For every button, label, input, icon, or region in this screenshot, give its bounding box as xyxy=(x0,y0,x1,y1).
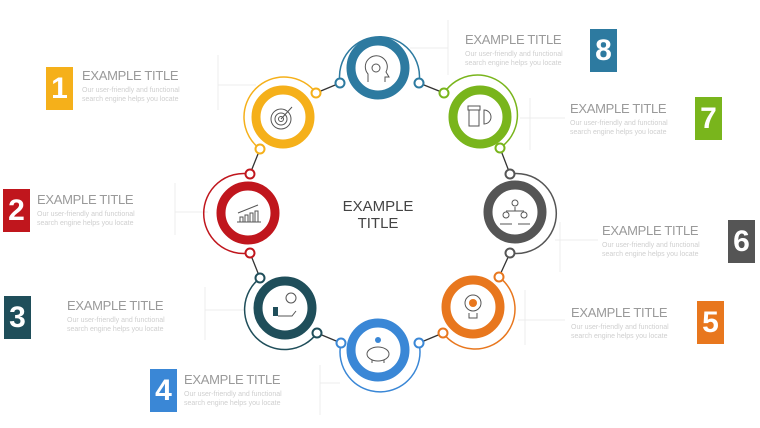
item 3: 3 xyxy=(9,301,26,334)
label 5 xyxy=(571,305,669,340)
label 2: EXAMPLE TITLE xyxy=(37,192,133,207)
circle 7 xyxy=(444,75,517,148)
item 4: 4 xyxy=(155,374,172,407)
label 3 xyxy=(67,298,165,333)
item 8 xyxy=(590,29,617,72)
label 1: search engine helps you locate xyxy=(82,96,179,103)
item 7: 7 xyxy=(700,102,717,135)
label 1: EXAMPLE TITLE xyxy=(82,68,178,83)
label 3: Our user-friendly and functional xyxy=(67,317,165,324)
label 3: search engine helps you locate xyxy=(67,326,164,333)
label 7: Our user-friendly and functional xyxy=(570,120,668,127)
item 2: 2 xyxy=(8,194,25,227)
circle 1 xyxy=(244,77,316,149)
label 5: Our user-friendly and functional xyxy=(571,324,669,331)
label 8 xyxy=(465,32,563,67)
item 3 xyxy=(4,296,31,339)
item 7 xyxy=(695,97,722,140)
label 5: EXAMPLE TITLE xyxy=(571,305,667,320)
connectors xyxy=(250,83,510,343)
circle 6 xyxy=(488,174,556,254)
item 8: 8 xyxy=(595,34,612,67)
label 1: Our user-friendly and functional xyxy=(82,87,180,94)
label 2: search engine helps you locate xyxy=(37,220,134,227)
label 6: Our user-friendly and functional xyxy=(602,242,700,249)
label 3: EXAMPLE TITLE xyxy=(67,298,163,313)
item 2 xyxy=(3,189,30,232)
item 6 xyxy=(728,220,755,263)
label 7: EXAMPLE TITLE xyxy=(570,101,666,116)
item 6: 6 xyxy=(733,225,750,258)
label 8: Our user-friendly and functional xyxy=(465,51,563,58)
item 5: 5 xyxy=(702,306,719,339)
dots xyxy=(246,78,514,348)
label 8: search engine helps you locate xyxy=(465,60,562,67)
circle 4 xyxy=(340,323,420,392)
label 2: Our user-friendly and functional xyxy=(37,211,135,218)
center title: EXAMPLE xyxy=(343,198,413,215)
label 6: search engine helps you locate xyxy=(602,251,699,258)
label 8: EXAMPLE TITLE xyxy=(465,32,561,47)
label 7: search engine helps you locate xyxy=(570,129,667,136)
label 2 xyxy=(37,192,135,227)
item 4 xyxy=(150,369,177,412)
label 7 xyxy=(570,101,668,136)
center title line 2: TITLE xyxy=(358,215,398,232)
label 1 xyxy=(82,68,180,103)
circle 2 xyxy=(204,174,275,254)
label 4: search engine helps you locate xyxy=(184,400,281,407)
label 4 xyxy=(184,372,282,407)
circle 8 xyxy=(340,37,420,95)
label 6 xyxy=(602,223,700,258)
item 5 xyxy=(697,301,724,344)
label 6: EXAMPLE TITLE xyxy=(602,223,698,238)
label 4: Our user-friendly and functional xyxy=(184,391,282,398)
label 4: EXAMPLE TITLE xyxy=(184,372,280,387)
item 1: 1 xyxy=(51,72,68,105)
item 1 xyxy=(46,67,73,110)
circle 3 xyxy=(245,278,317,350)
circle 5 xyxy=(443,277,515,349)
label 5: search engine helps you locate xyxy=(571,333,668,340)
